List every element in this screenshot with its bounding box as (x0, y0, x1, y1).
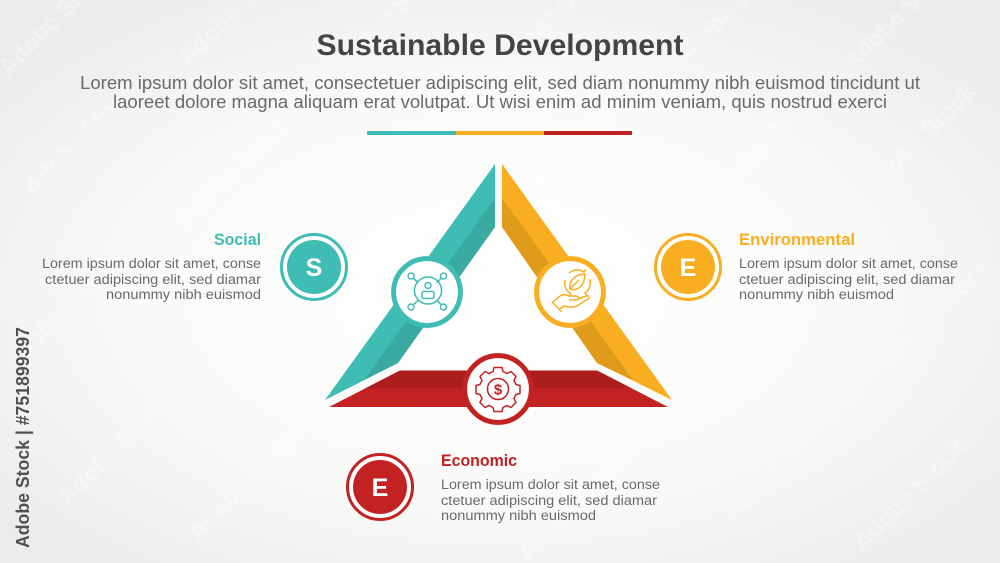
text: Adobe Stock (718, 403, 842, 526)
text: Adobe Stock (183, 423, 307, 546)
text: Adobe Stock (0, 253, 122, 376)
social heading: Social (214, 231, 261, 249)
text: Adobe Stock (18, 78, 142, 201)
environmental text (739, 256, 958, 302)
tricolour divider (367, 131, 632, 135)
environmental text: nonummy nibh euismod (739, 287, 894, 302)
intro text: laoreet dolore magna aliquam erat volutpat. Ut wisi enim ad minim veniam, quis nostrud exerci (113, 92, 887, 112)
social badge (282, 234, 346, 300)
social block (42, 231, 346, 302)
environmental badge: E (680, 254, 696, 282)
environmental block (656, 231, 958, 302)
text: Adobe Stock (873, 253, 997, 376)
economic node icon (465, 356, 531, 422)
social text: Lorem ipsum dolor sit amet, conse (42, 256, 261, 271)
text: Adobe Stock (703, 83, 827, 206)
text: Adobe Stock (363, 68, 487, 191)
social text (42, 256, 262, 302)
text: Adobe Stock (693, 263, 817, 386)
text: Adobe Stock (513, 443, 637, 563)
economic heading: Economic (441, 452, 517, 470)
red side (329, 370, 668, 407)
stock id: Adobe Stock | #751899397 (12, 327, 33, 548)
social text: nonummy nibh euismod (106, 287, 261, 302)
environmental text: Lorem ipsum dolor sit amet, conse (739, 256, 958, 271)
economic text: Lorem ipsum dolor sit amet, conse (441, 477, 660, 492)
economic block (348, 452, 660, 523)
economic badge: E (372, 474, 388, 502)
intro text (80, 73, 920, 112)
text: Adobe Stock (171, 108, 295, 231)
title: Sustainable Development (316, 29, 684, 62)
social badge: S (306, 254, 322, 282)
text: Adobe Stock (53, 388, 177, 511)
social text: ctetuer adipiscing elit, sed diamar (45, 272, 262, 287)
economic badge (348, 454, 412, 520)
text: Adobe Stock (848, 433, 972, 556)
intro text: Lorem ipsum dolor sit amet, consectetuer adipiscing elit, sed diam nonummy nibh euismod tincidunt ut (80, 73, 920, 93)
social node icon (394, 259, 460, 325)
yellow side (502, 164, 672, 400)
environmental node icon (537, 259, 603, 325)
economic text: nonummy nibh euismod (441, 508, 596, 523)
triangle diagram (325, 164, 672, 422)
teal side (325, 164, 495, 400)
text: Adobe Stock (523, 73, 647, 196)
economic node icon: $ (494, 382, 503, 398)
environmental badge (656, 234, 720, 300)
economic text (441, 477, 660, 523)
economic text: ctetuer adipiscing elit, sed diamar (441, 493, 658, 508)
text: Adobe Stock (858, 78, 982, 201)
environmental text: ctetuer adipiscing elit, sed diamar (739, 272, 956, 287)
environmental heading: Environmental (739, 231, 855, 249)
text: Adobe Stock (203, 238, 327, 361)
